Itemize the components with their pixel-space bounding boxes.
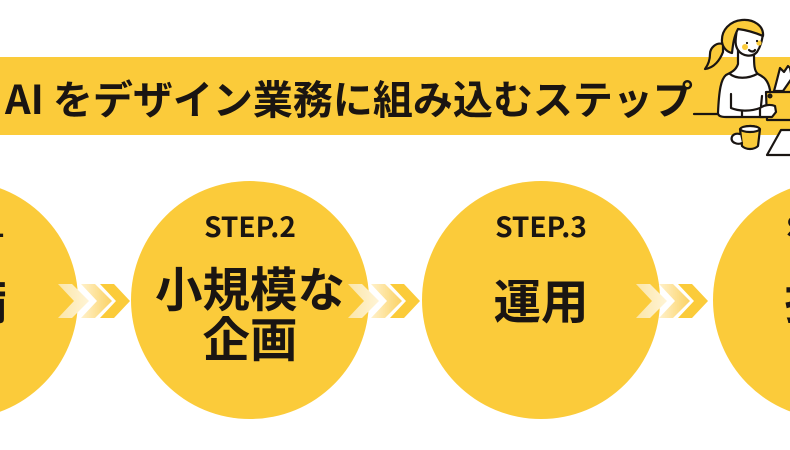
hair [722,20,763,53]
mug [740,126,760,149]
panel: step 1 circle [0,181,78,419]
table line [694,113,718,115]
title band [0,57,790,135]
cheeks and eyes [742,44,748,50]
arrow: step 1 to step 2 [58,284,130,318]
raised hand [774,66,790,91]
neck and body [718,50,770,117]
step 3 name: 運用 [494,264,588,333]
panel: step 4 circle [713,181,790,419]
holding hand [760,105,776,117]
title: AI をデザイン業務に組み込むステップ [5,68,693,126]
sleeve lines [731,94,760,111]
face [736,28,763,56]
step 2 name: 小規模な [155,252,345,321]
step 3 label: STEP.3 [495,206,587,246]
step 2 name [155,252,345,371]
step 2 label: STEP.2 [204,206,296,246]
tablet [766,92,790,120]
step 2 name: 企画 [202,302,298,371]
panel: step 3 circle [422,181,660,419]
arrow: step 2 to step 3 [348,284,420,318]
arrow: step 3 to step 4 [636,284,708,318]
icon: woman working at a desk with tablet and mug [692,18,790,156]
paper [767,130,790,155]
ponytail [705,44,723,69]
panel: step 2 circle [131,181,369,419]
collar [730,74,757,78]
